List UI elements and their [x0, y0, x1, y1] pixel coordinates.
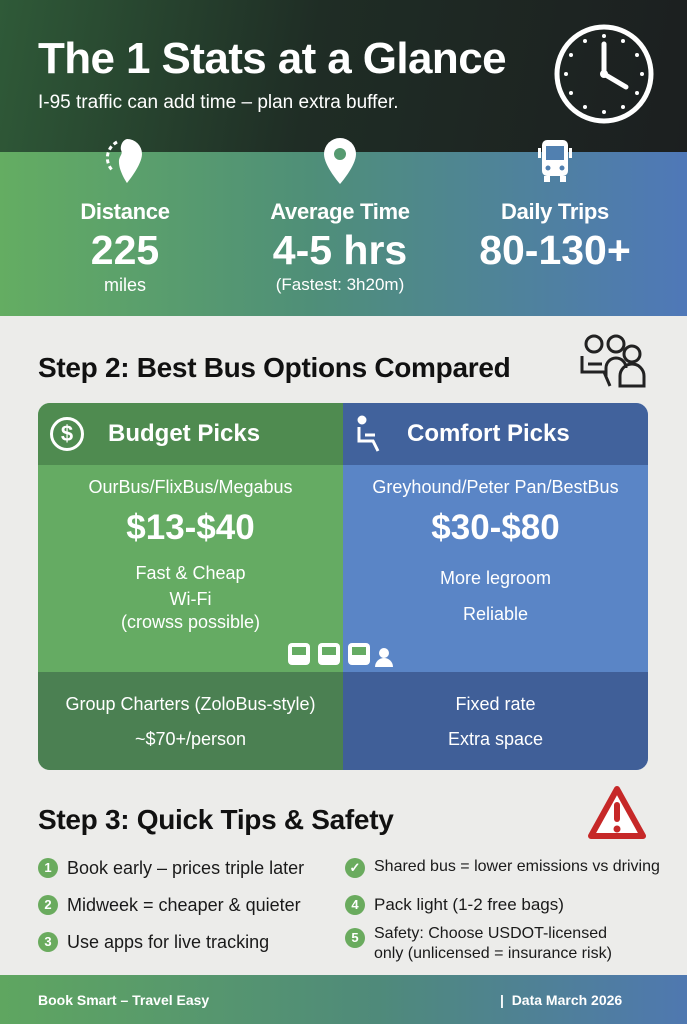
comfort body: Greyhound/Peter Pan/BestBus	[372, 477, 619, 497]
tip 5: only (unlicensed = insurance risk)	[374, 945, 612, 962]
stat: daily trips	[479, 140, 631, 273]
budget body: (crowss possible)	[121, 612, 260, 632]
icon: warning	[588, 786, 646, 839]
group charters: ~$70+/person	[135, 729, 246, 749]
stat: average time: (Fastest: 3h20m)	[276, 275, 404, 294]
stat: average time	[270, 138, 410, 294]
comfort body: $30-$80	[431, 508, 560, 547]
stat: daily trips: Daily Trips	[501, 199, 609, 224]
icon: route pin	[106, 139, 142, 183]
budget body: Fast & Cheap	[135, 563, 246, 583]
header band	[0, 0, 687, 152]
tip check: Shared bus = lower emissions vs driving	[374, 858, 660, 875]
tip 5: 5	[351, 930, 359, 945]
tip 3: Use apps for live tracking	[67, 932, 269, 952]
comfort header	[343, 403, 648, 465]
stat: distance: miles	[104, 275, 146, 295]
tip 2: Midweek = cheaper & quieter	[67, 895, 301, 915]
comfort header: Comfort Picks	[407, 420, 570, 447]
icon: clock	[554, 24, 654, 124]
icon: bus	[538, 140, 572, 182]
tip 2: 2	[44, 897, 52, 912]
footer: | Data March 2026	[500, 992, 622, 1008]
stat: average time: Average Time	[270, 199, 410, 224]
budget body: $13-$40	[126, 508, 255, 547]
footer	[0, 975, 687, 1024]
budget body: Wi-Fi	[170, 589, 211, 609]
tip 1: Book early – prices triple later	[67, 858, 304, 878]
heading: step 3: Step 3: Quick Tips & Safety	[38, 804, 394, 835]
tip 5	[345, 925, 612, 962]
tip 4: 4	[351, 897, 359, 912]
tip check: ✓	[350, 860, 360, 875]
comfort body: More legroom	[440, 568, 551, 588]
stat: distance	[80, 139, 170, 295]
subtitle: I-95 traffic can add time – plan extra buffer.	[38, 92, 399, 113]
stat: daily trips: 80-130+	[479, 227, 631, 273]
footer: Book Smart – Travel Easy	[38, 992, 209, 1008]
fixed rate	[343, 672, 648, 770]
comfort body	[372, 477, 619, 624]
budget header: Budget Picks	[108, 420, 260, 447]
tip 4: Pack light (1-2 free bags)	[374, 895, 564, 914]
fixed rate: Extra space	[448, 729, 543, 749]
stat: distance: Distance	[80, 199, 170, 224]
budget body	[88, 477, 293, 632]
icon: buses row	[288, 643, 393, 667]
stats band	[0, 152, 687, 316]
heading: step 2: Step 2: Best Bus Options Compared	[38, 352, 510, 383]
tip 1: 1	[44, 860, 52, 875]
fixed rate: Fixed rate	[455, 694, 536, 714]
icon: location pin	[324, 138, 356, 184]
stat: average time: 4-5 hrs	[273, 227, 407, 273]
panel: budget picks	[38, 403, 343, 770]
tip 5: Safety: Choose USDOT-licensed	[374, 925, 607, 942]
tip 3: 3	[44, 934, 52, 949]
icon: people seated	[580, 334, 646, 388]
group charters	[38, 672, 343, 770]
group charters: Group Charters (ZoloBus-style)	[65, 694, 316, 714]
tips list	[38, 858, 660, 962]
comfort body: Reliable	[463, 604, 528, 624]
budget body: OurBus/FlixBus/Megabus	[88, 477, 293, 497]
icon: dollar coin	[50, 417, 84, 451]
icon: seat	[358, 416, 380, 452]
panel: comfort picks	[343, 403, 648, 770]
budget header	[38, 403, 343, 465]
stat: distance: 225	[91, 227, 159, 273]
comparison card	[38, 403, 648, 770]
title: The 1 Stats at a Glance	[38, 34, 506, 83]
icon: dollar coin: $	[61, 421, 73, 446]
